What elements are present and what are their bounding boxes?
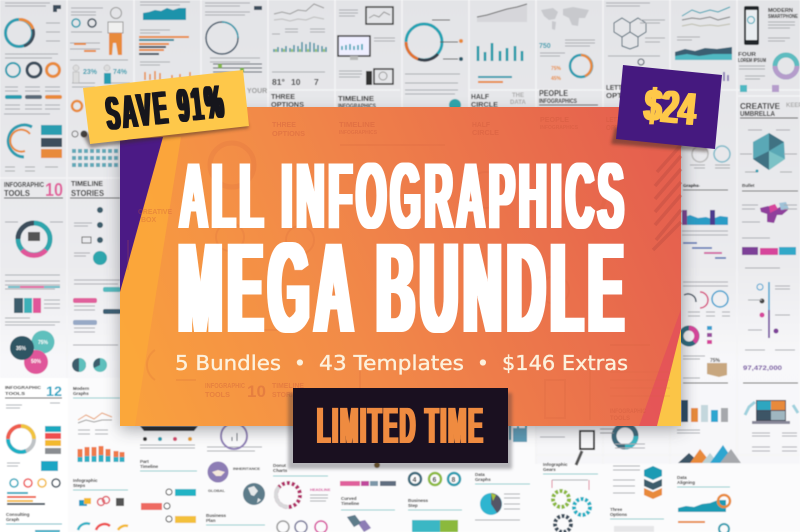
subtitle: • — [477, 351, 489, 375]
template: donut and column chart — [682, 146, 730, 258]
template: infographic tools 10: INFOGRAPHIC — [4, 180, 44, 189]
yellow triangle in lower right — [657, 329, 681, 426]
template: data graph numbers and gears: Options — [610, 512, 627, 517]
template: modern smartphone and four lorem ipsum: MODERN — [768, 8, 793, 14]
template: people and industries column: TIMELINE — [71, 179, 103, 188]
template: data graph numbers and gears: Graphs — [475, 477, 491, 482]
ghost template headings inside the panel: TOOLS — [610, 416, 630, 422]
template: modern smartphone and four lorem ipsum: FOUR — [738, 52, 756, 58]
save 91% badge: SAVE 91% — [103, 74, 226, 140]
template: part timeline and business: Timeline — [140, 464, 159, 469]
template: puzzle bullets: Bullet — [742, 183, 755, 188]
template: creative umbrella: CREATIVE — [740, 101, 780, 111]
template: half circle charts — [471, 4, 527, 109]
template: laptop and tiles: People — [744, 467, 759, 472]
template: ring and timeline column one — [4, 3, 62, 171]
template: bar charts column three — [139, 2, 190, 80]
template: part timeline and business: Part — [140, 459, 149, 464]
title line one: ALL INFOGRAPHICS — [180, 144, 624, 249]
ghost template headings inside the panel: INFOGRAPHIC — [610, 409, 647, 415]
template: hexagons and letter options: OPT — [606, 91, 622, 100]
template: infographic tools 10 — [4, 180, 63, 289]
template: data graph numbers and gears: Business — [408, 498, 429, 503]
ghost template headings inside the panel: 10 — [247, 382, 266, 401]
ghost charts inside the panel — [128, 143, 670, 420]
template: infographic tools 12: Consulting — [6, 512, 30, 517]
ghost template headings inside the panel: TOOLS — [205, 390, 230, 399]
template: data graph numbers and gears: Data — [677, 475, 687, 480]
template: part timeline and business: GLOBAL — [208, 488, 225, 493]
lighter orange left wedge — [120, 137, 181, 426]
template: data graph numbers and gears: Gears — [543, 467, 556, 472]
template: vertical timeline and big number: 97,472,000 — [743, 365, 782, 372]
template: column chart and mountains — [678, 378, 741, 463]
subtitle: • — [294, 351, 306, 375]
subtitle: 43 Templates — [319, 351, 464, 375]
template: people and industries column: STORIES — [71, 189, 105, 198]
template: three options — [271, 4, 326, 109]
template: three options: OPTIONS — [271, 100, 304, 109]
template: half circle charts: HALF — [471, 92, 489, 101]
template: part timeline and business: Plan — [206, 518, 216, 523]
template: three options: 81° — [272, 77, 285, 87]
template: hexagons and letter options: LETT — [606, 83, 622, 92]
ghost template headings inside the panel: INFOGRAPHIC — [205, 381, 245, 390]
template: pills, pies and modern graphs: Graphs — [73, 391, 89, 396]
template: pills, pies and modern graphs: Steps — [73, 483, 86, 488]
template: people and industries column: 74% — [113, 69, 128, 76]
template: people and industries column — [70, 8, 130, 284]
template: circle chart column four — [205, 3, 267, 95]
template: data graph numbers and gears — [402, 422, 800, 532]
template: data graph numbers and gears: Step — [408, 503, 418, 508]
template: infographic tools 12: INFOGRAPHIC — [5, 385, 42, 391]
template: puzzle bullets — [742, 183, 798, 255]
template: part timeline and business — [135, 423, 535, 532]
save badge shadow — [82, 116, 249, 148]
template: half circle charts: THE — [512, 93, 524, 99]
template: part timeline and business: Charts — [273, 468, 288, 473]
ghost template headings inside the panel: HALF — [472, 120, 490, 129]
template: donut and column chart: Graphs — [683, 183, 699, 188]
template: timeline monitors — [338, 7, 395, 110]
template: people and industries column: 23% — [83, 69, 98, 76]
template: data graph numbers and gears: 4 — [412, 477, 416, 484]
template: data graph numbers and gears: Three — [610, 507, 623, 512]
template: infographic tools 12: TOOLS — [5, 391, 26, 397]
ghost template headings inside the panel: CREATIVE — [138, 209, 172, 216]
template: timeline monitors: TIMELINE — [338, 94, 374, 103]
ghost template headings inside the panel: OPTIONS — [606, 123, 634, 132]
template: pills, pies and modern graphs — [68, 287, 135, 532]
save 91% badge — [83, 70, 249, 144]
template: world map and people infographics — [539, 7, 598, 105]
limited time banner shadow — [288, 393, 512, 469]
template: lower info rows behind the limited time banner — [410, 428, 700, 448]
ghost template headings inside the panel: TIMELINE — [272, 381, 304, 390]
subtitle — [175, 351, 628, 375]
template: infographic tools 10: TOOLS — [4, 189, 31, 198]
price badge — [616, 65, 722, 149]
template: modern smartphone and four lorem ipsum: LOREM IPSUM — [738, 58, 766, 64]
template: pills, pies and modern graphs: Modern — [73, 386, 90, 391]
subtitle: $146 Extras — [502, 351, 628, 375]
template: half circle charts: DATA — [510, 100, 526, 106]
template: data graph numbers and gears: Aligning — [677, 480, 695, 485]
template: gauges, donut and package: 75% — [710, 358, 721, 364]
template: part timeline and business: INHERITANCE — [233, 466, 260, 471]
ghost template headings inside the panel — [138, 115, 647, 422]
template: hexagons and letter options — [606, 3, 665, 100]
template: creative umbrella — [740, 101, 800, 172]
template: data graph numbers and gears: 8 — [452, 477, 456, 484]
template: creative umbrella: UMBRELLA — [740, 111, 775, 118]
template: three options: 10 — [291, 77, 301, 87]
price badge: $24 — [642, 79, 699, 136]
ghost template headings inside the panel: THREE — [272, 120, 296, 129]
limited time banner: LIMITED TIME — [317, 399, 483, 455]
price badge shadow — [611, 127, 708, 152]
template: data graph numbers and gears: Data — [475, 472, 485, 477]
template: part timeline and business: HEADLINE — [310, 487, 331, 492]
red stripe in lower right — [639, 309, 681, 426]
template: circle chart column four: YOUR — [247, 88, 267, 95]
card drop shadow — [120, 114, 683, 430]
ghost template headings inside the panel: INFOGRAPHICS — [540, 125, 578, 131]
template: gauges, donut and package — [681, 282, 730, 377]
template: modern smartphone and four lorem ipsum — [738, 6, 798, 92]
ghost template headings inside the panel: OPTIONS — [272, 129, 305, 138]
template: part timeline and business: Curved — [341, 496, 357, 501]
template: donut table and venn — [5, 275, 60, 374]
ghost template headings inside the panel: INFOGRAPHICS — [339, 130, 377, 136]
purple corner wedge — [120, 137, 163, 292]
template: part timeline and business: Donut — [273, 463, 286, 468]
subtitle: 5 Bundles — [175, 351, 281, 375]
template: data graph numbers and gears: 6 — [432, 477, 436, 484]
template: world map and people infographics: INFOGRAPHICS — [539, 99, 577, 105]
template: world map and people infographics: PEOPLE — [539, 88, 568, 98]
ghost template headings inside the panel: BOX — [141, 217, 156, 224]
template: donut table and venn: 50% — [31, 359, 42, 365]
template: donut table and venn: 75% — [38, 340, 49, 346]
template: infographic tools 12: 12 — [46, 383, 62, 399]
ghost template headings inside the panel: TIMELINE — [339, 120, 375, 129]
template: vertical timeline and big number — [743, 268, 795, 372]
ghost template headings inside the panel: LETTER — [606, 115, 628, 124]
template: big ring column seven — [405, 20, 463, 111]
ghost template headings inside the panel: STORIES — [272, 390, 302, 399]
hatch stripes in upper right — [653, 145, 681, 250]
template: world map and people infographics: 45% — [551, 76, 562, 82]
template: part timeline and business: Business — [206, 513, 227, 518]
template: timeline monitors: INFOGRAPHICS — [338, 104, 376, 110]
template: laptop and tiles — [743, 383, 798, 532]
template: world map and people infographics: 75% — [551, 66, 562, 72]
template: infographic tools 10: 10 — [45, 180, 63, 200]
template: part timeline and business: Timeline — [341, 501, 360, 506]
template: data graph numbers and gears: Infographic — [543, 462, 568, 467]
main orange panel — [120, 107, 681, 426]
template: infographic tools 12: Graph — [6, 517, 20, 522]
title line two: MEGA BUNDLE — [178, 216, 623, 359]
template: infographic tools 12 — [0, 378, 68, 532]
template: line and area charts — [675, 7, 732, 81]
template: world map and people infographics: 750 — [539, 43, 551, 50]
template: three options: THREE — [271, 92, 295, 101]
template: half circle charts: CIRCLE — [471, 100, 498, 109]
template: pills, pies and modern graphs: Infographic — [73, 478, 98, 483]
limited time banner — [293, 388, 508, 463]
template: donut table and venn: 35% — [16, 346, 27, 352]
template: three options: 7 — [314, 77, 319, 87]
ghost template headings inside the panel: PEOPLE — [540, 115, 569, 124]
ghost template headings inside the panel: CIRCLE — [472, 128, 499, 137]
